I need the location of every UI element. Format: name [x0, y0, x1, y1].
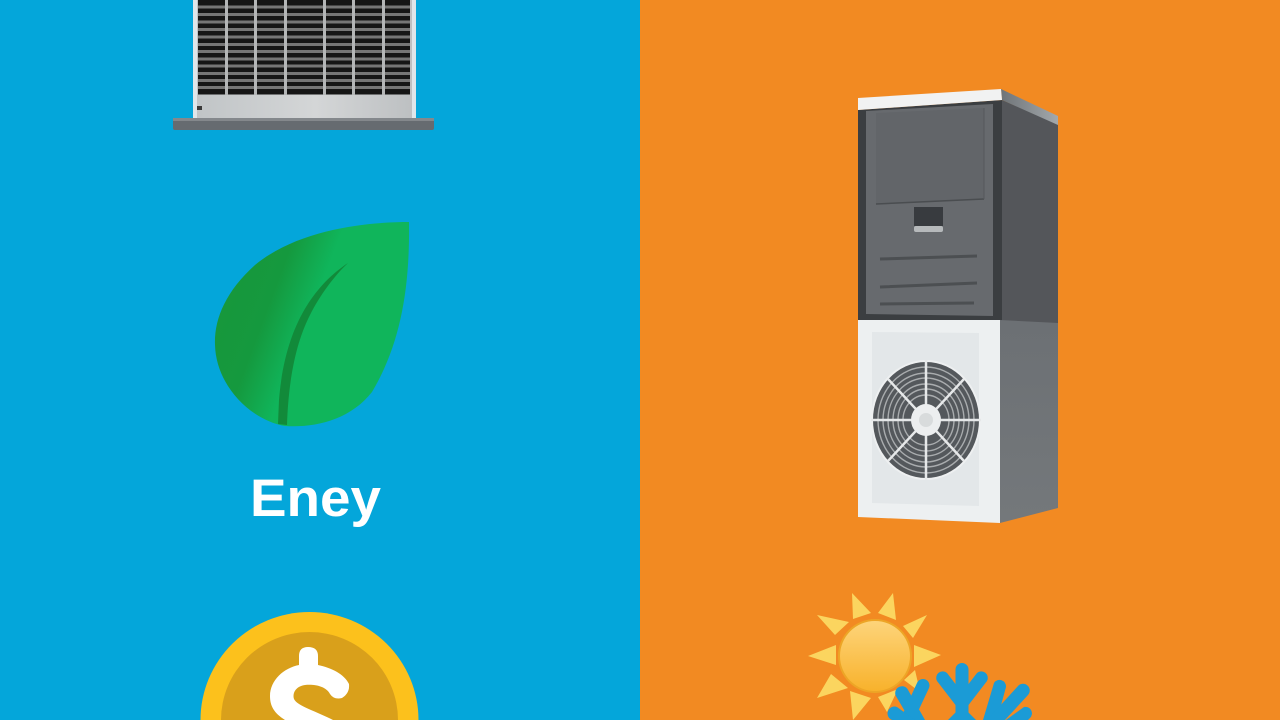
label: Eney: Eney	[250, 469, 382, 528]
icon: snowflakes	[888, 663, 1032, 720]
icon: sun	[808, 593, 941, 720]
icon: lower fan module of outdoor unit	[858, 320, 1058, 523]
icon: gold dollar coin	[200, 612, 418, 720]
panel: orange right background	[640, 0, 1280, 720]
icon: green leaf	[215, 222, 409, 426]
icon: upper cabinet of outdoor unit	[858, 89, 1058, 324]
icon: window air conditioner	[173, 0, 434, 130]
panel: blue left background	[0, 0, 640, 720]
